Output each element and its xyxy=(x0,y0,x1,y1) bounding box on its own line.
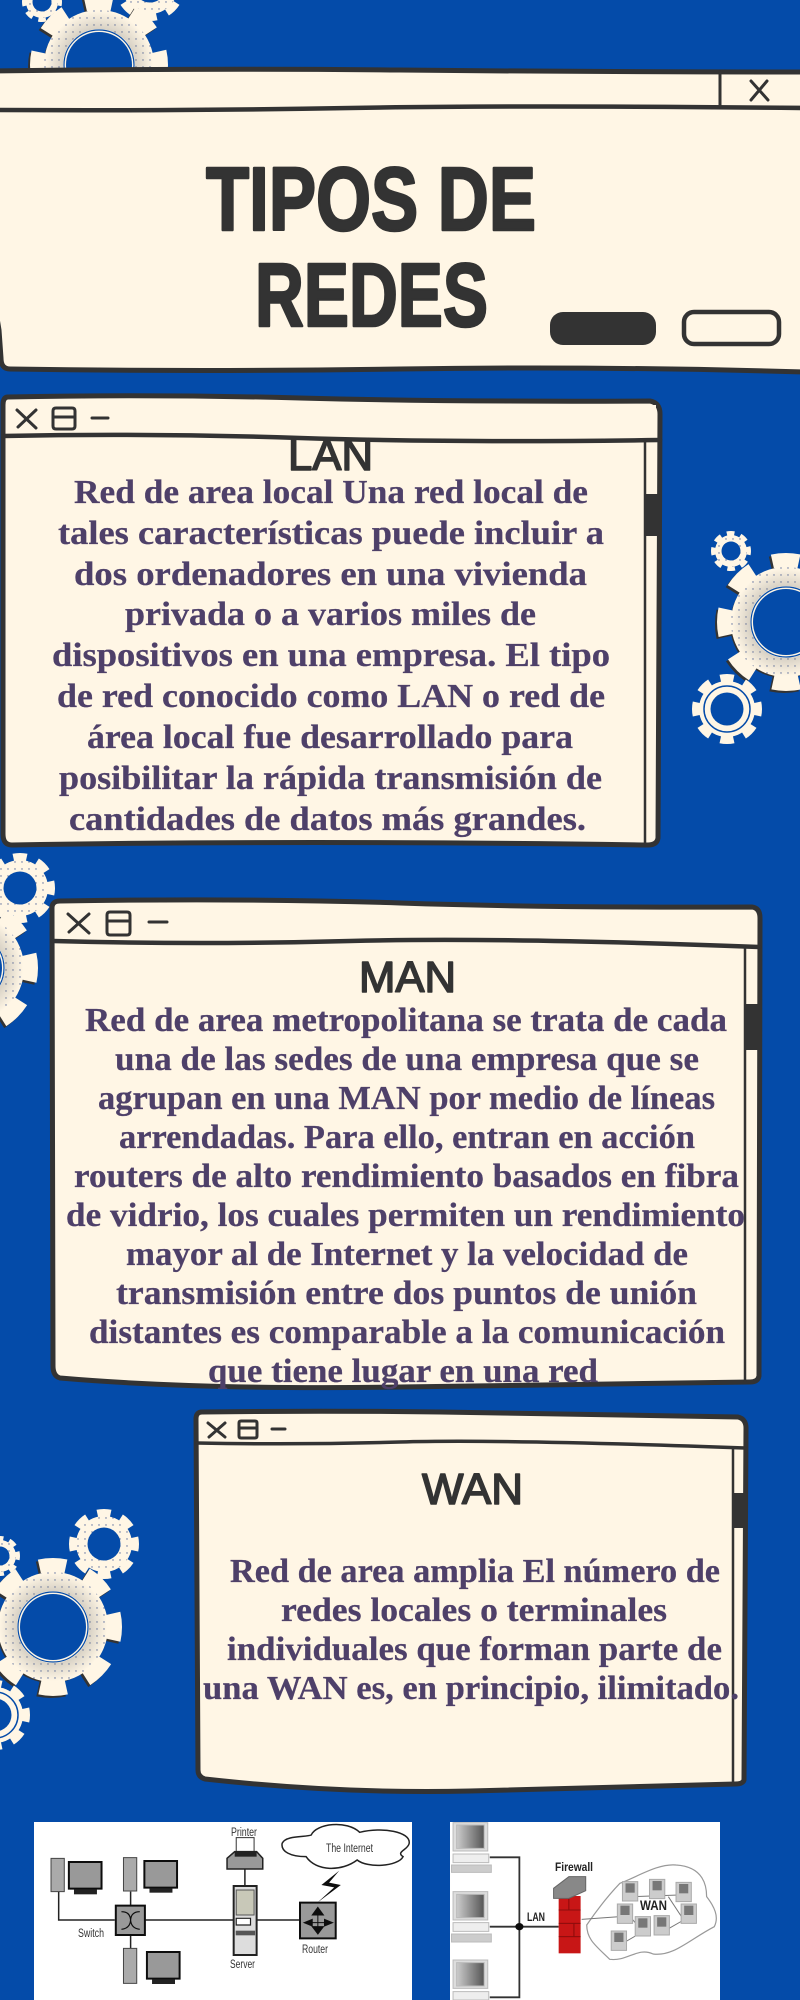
text block: MAN: arrendadas. Para ello, entran en acción xyxy=(119,1119,695,1156)
icon: gears right of LAN xyxy=(697,534,800,739)
heading: WAN: WAN xyxy=(422,1465,523,1514)
diagram: LAN firewall WAN xyxy=(450,1822,720,2000)
icon: minimise xyxy=(149,920,167,924)
label: Server: Server xyxy=(230,1959,255,1971)
panel: MAN xyxy=(52,900,760,1390)
icon: minimise xyxy=(92,416,108,420)
text block: MAN: transmisión entre dos puntos de unión xyxy=(116,1275,697,1312)
text block: LAN: área local fue desarrollado para xyxy=(87,719,573,756)
label: Firewall: Firewall xyxy=(555,1860,593,1874)
icon: close X xyxy=(208,1423,225,1437)
text block: LAN: dispositivos en una empresa. El tipo xyxy=(52,637,610,674)
icon: close X xyxy=(68,914,89,933)
panel: WAN xyxy=(196,1411,746,1792)
icon: minimise xyxy=(272,1428,285,1430)
icon: window xyxy=(239,1421,257,1438)
scrollbar xyxy=(645,440,659,843)
button: outlined xyxy=(684,312,779,344)
text block: MAN: de vidrio, los cuales permiten un rendimiento xyxy=(66,1197,745,1234)
label: The Internet: The Internet xyxy=(326,1843,374,1855)
text block: LAN: posibilitar la rápida transmisión de xyxy=(59,760,602,797)
text block: MAN: agrupan en una MAN por medio de líneas xyxy=(98,1080,715,1117)
diagram: LAN network xyxy=(34,1822,412,2000)
icon: gears left of MAN xyxy=(0,858,50,1030)
title: REDES xyxy=(255,246,488,346)
icon: gears top left xyxy=(25,0,180,127)
panel: title window xyxy=(0,69,800,372)
title: TIPOS DE xyxy=(206,150,536,250)
text block: MAN: Red de area metropolitana se trata de cada xyxy=(85,1002,727,1039)
text block: MAN: mayor al de Internet y la velocidad de xyxy=(126,1236,688,1273)
label: LAN: LAN xyxy=(527,1910,545,1924)
title xyxy=(206,150,536,346)
text block: LAN: tales características puede incluir a xyxy=(58,515,604,552)
text block: MAN: routers de alto rendimiento basados en fibra xyxy=(74,1158,739,1195)
text block: WAN: una WAN es, en principio, ilimitado. xyxy=(203,1670,739,1707)
text block: LAN: Red de area local Una red local de xyxy=(74,474,588,511)
icon: gears left of WAN xyxy=(0,1514,134,1745)
text block: WAN: redes locales o terminales xyxy=(281,1592,667,1629)
text block: MAN: que tiene lugar en una red xyxy=(208,1353,598,1390)
heading: LAN: LAN xyxy=(288,431,373,480)
label: Switch: Switch xyxy=(78,1928,104,1940)
button: filled xyxy=(550,312,656,345)
text block: MAN: una de las sedes de una empresa que se xyxy=(115,1041,699,1078)
text block: LAN: dos ordenadores en una vivienda xyxy=(74,556,587,593)
scrollbar xyxy=(733,1448,745,1784)
icon: close X xyxy=(751,81,768,100)
text block: WAN xyxy=(203,1553,739,1707)
text block: LAN: cantidades de datos más grandes. xyxy=(69,801,586,838)
label: Router: Router xyxy=(302,1944,328,1956)
text block: MAN xyxy=(66,1002,745,1390)
icon: close X xyxy=(17,410,36,428)
text block: LAN: de red conocido como LAN o red de xyxy=(57,678,605,715)
label: Printer: Printer xyxy=(231,1827,257,1839)
text block: MAN: distantes es comparable a la comunicación xyxy=(89,1314,725,1351)
panel: LAN xyxy=(3,396,660,845)
heading: MAN: MAN xyxy=(359,953,456,1002)
scrollbar xyxy=(745,947,759,1382)
label: WAN: WAN xyxy=(640,1897,667,1913)
icon: window xyxy=(53,408,75,429)
icon: window xyxy=(107,912,130,935)
text block: LAN: privada o a varios miles de xyxy=(125,596,536,633)
text block: WAN: Red de area amplia El número de xyxy=(230,1553,720,1590)
text block: WAN: individuales que forman parte de xyxy=(227,1631,722,1668)
text block: LAN xyxy=(52,474,610,838)
